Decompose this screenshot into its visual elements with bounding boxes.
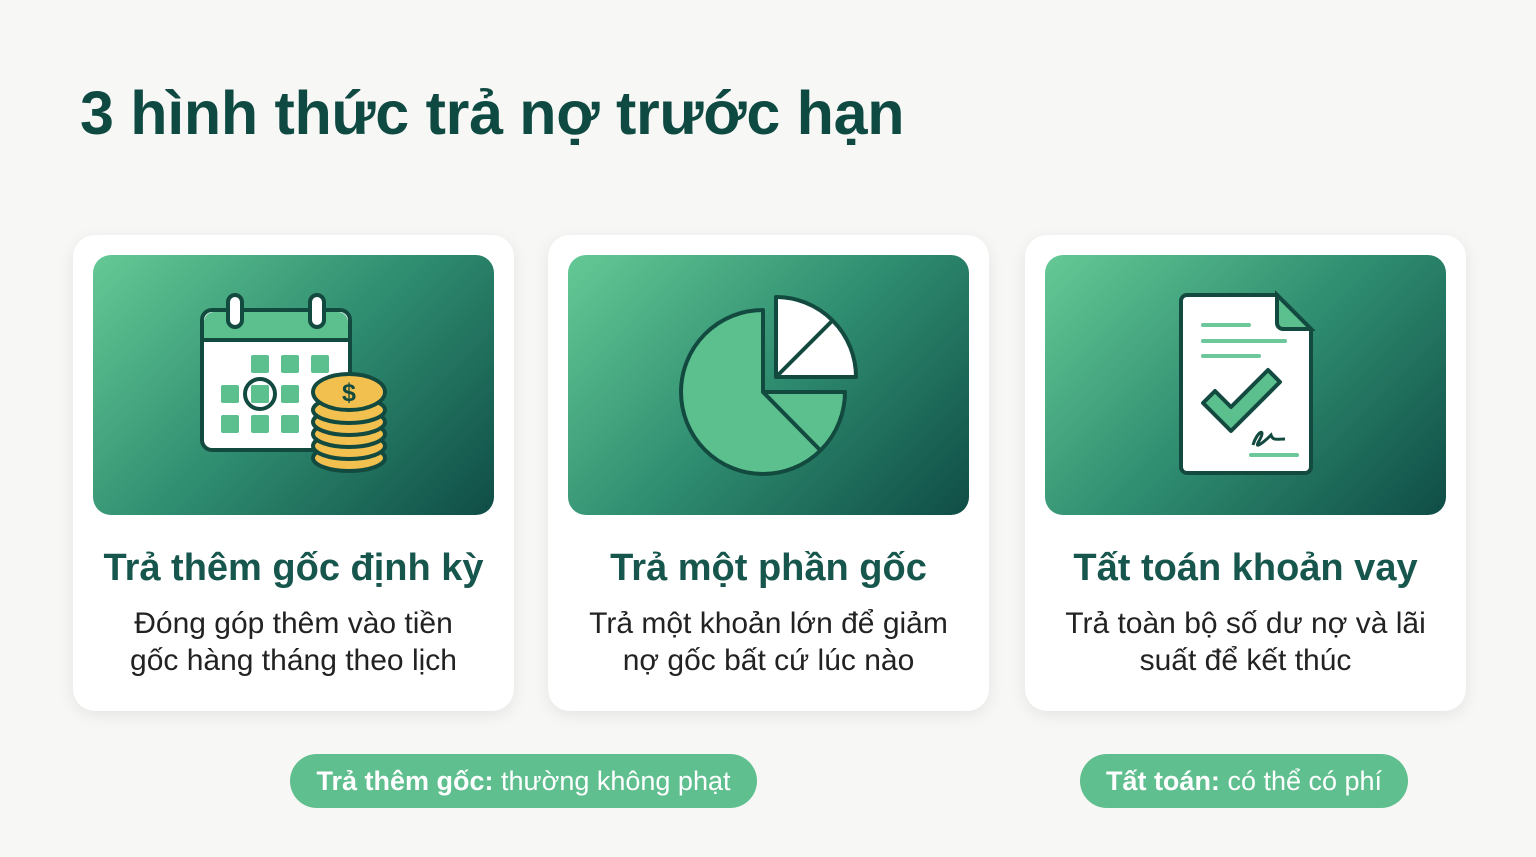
text 3 bbox=[1065, 607, 1426, 677]
pill note 2: Tất toán: có thể có phí bbox=[1106, 766, 1382, 796]
icon panel: calendar and coins bbox=[93, 255, 494, 515]
text 1: Đóng góp thêm vào tiền bbox=[134, 607, 453, 640]
heading 1: Trả thêm gốc định kỳ bbox=[103, 547, 484, 589]
title: 3 hình thức trả nợ trước hạn bbox=[80, 79, 904, 147]
heading 3: Tất toán khoản vay bbox=[1073, 547, 1418, 589]
card 2 bbox=[548, 235, 989, 711]
icon panel: calendar and coins: $ bbox=[342, 379, 356, 407]
pill note 1 bbox=[290, 754, 757, 808]
card 3 bbox=[1025, 235, 1466, 711]
text 3: suất để kết thúc bbox=[1140, 644, 1351, 677]
text 1: gốc hàng tháng theo lịch bbox=[130, 644, 457, 677]
text 2: nợ gốc bất cứ lúc nào bbox=[623, 644, 914, 677]
icon panel: signed document bbox=[1045, 255, 1446, 515]
text 2 bbox=[589, 607, 948, 677]
text 2: Trả một khoản lớn để giảm bbox=[589, 607, 948, 640]
text 1 bbox=[130, 607, 457, 677]
heading 2: Trả một phần gốc bbox=[610, 547, 927, 589]
icon panel: pie chart bbox=[568, 255, 969, 515]
text 3: Trả toàn bộ số dư nợ và lãi bbox=[1065, 607, 1426, 640]
card 1 bbox=[73, 235, 514, 711]
pill note 1: Trả thêm gốc: thường không phạt bbox=[316, 766, 730, 796]
pill note 2 bbox=[1080, 754, 1408, 808]
